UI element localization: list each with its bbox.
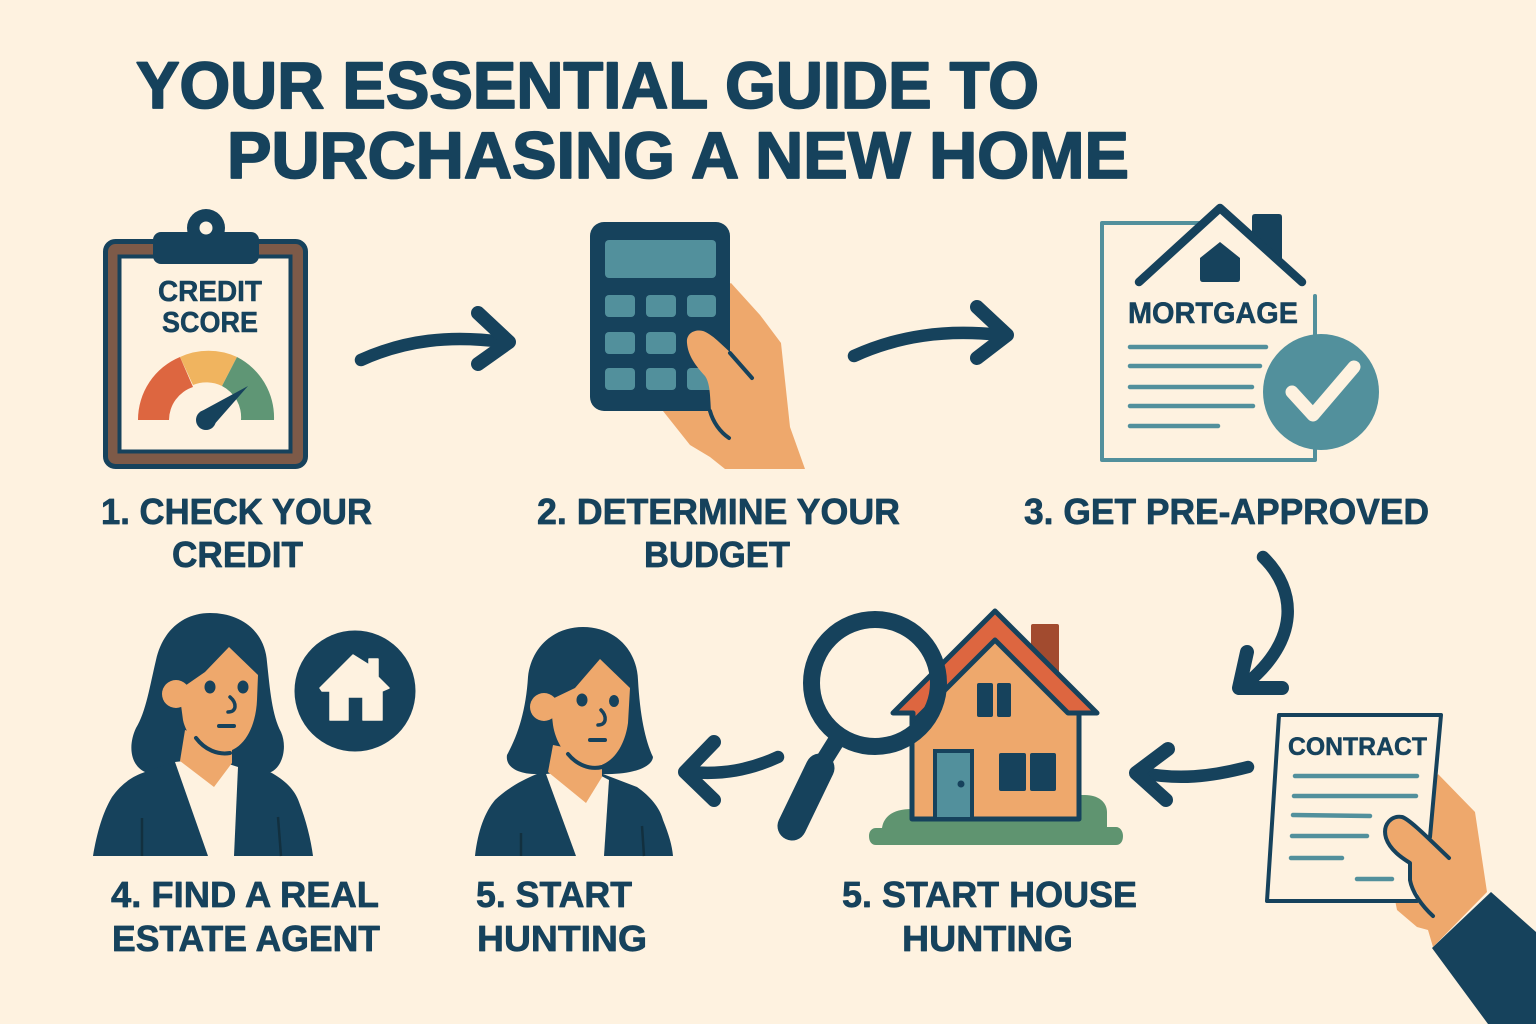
label: step 5 start hunting: 5. START	[476, 874, 632, 915]
label: step 1	[101, 491, 372, 575]
arrow: house to agent	[685, 742, 778, 800]
title: PURCHASING A NEW HOME	[227, 118, 1129, 192]
icon: person short hair	[475, 627, 673, 856]
label: step 2	[537, 491, 900, 575]
label: step 2: BUDGET	[644, 534, 790, 575]
gauge	[138, 351, 274, 430]
arrow: step 1 to step 2	[361, 313, 509, 364]
grass	[869, 795, 1123, 845]
icon: real estate agent	[93, 613, 416, 856]
label: step 5 start hunting: HUNTING	[477, 918, 647, 959]
icon: hand holding contract: CONTRACT	[1288, 733, 1427, 761]
icon: credit score clipboard: CREDIT	[158, 276, 262, 308]
label: step 5 start hunting	[476, 874, 647, 959]
label: step 4: 4. FIND A REAL	[111, 874, 379, 915]
title: YOUR ESSENTIAL GUIDE TO	[136, 48, 1039, 122]
icon: house with magnifying glass	[792, 611, 1123, 845]
label: step 2: 2. DETERMINE YOUR	[537, 491, 900, 532]
label: step 5 house hunting: HUNTING	[902, 918, 1073, 959]
lower windows	[999, 753, 1056, 791]
house body	[912, 636, 1079, 819]
icon: credit score clipboard: SCORE	[162, 307, 258, 339]
roof	[893, 611, 1097, 722]
label: step 1: 1. CHECK YOUR	[101, 491, 372, 532]
label: step 4: ESTATE AGENT	[112, 918, 380, 959]
icon: approved check	[1263, 334, 1379, 450]
magnifying glass	[792, 620, 938, 826]
label: step 5 house hunting	[842, 874, 1137, 959]
upper windows	[977, 683, 1011, 717]
icon: hand holding calculator	[590, 222, 805, 469]
label: step 4	[111, 874, 380, 959]
title	[136, 48, 1129, 192]
chimney	[1031, 624, 1059, 684]
icon: house badge	[294, 630, 416, 752]
icon: credit score clipboard	[106, 209, 306, 466]
arrow: step 2 to step 3	[854, 307, 1007, 358]
door	[935, 751, 972, 819]
label: step 3: 3. GET PRE-APPROVED	[1024, 491, 1429, 532]
label: step 1: CREDIT	[172, 534, 303, 575]
arrow: step 3 to contract	[1239, 557, 1288, 688]
icon: hand holding contract	[1267, 715, 1536, 1024]
arrow: contract to house	[1136, 749, 1248, 800]
icon: mortgage document: MORTGAGE	[1128, 297, 1298, 330]
label: step 5 house hunting: 5. START HOUSE	[842, 874, 1137, 915]
icon: mortgage document	[1102, 208, 1379, 460]
